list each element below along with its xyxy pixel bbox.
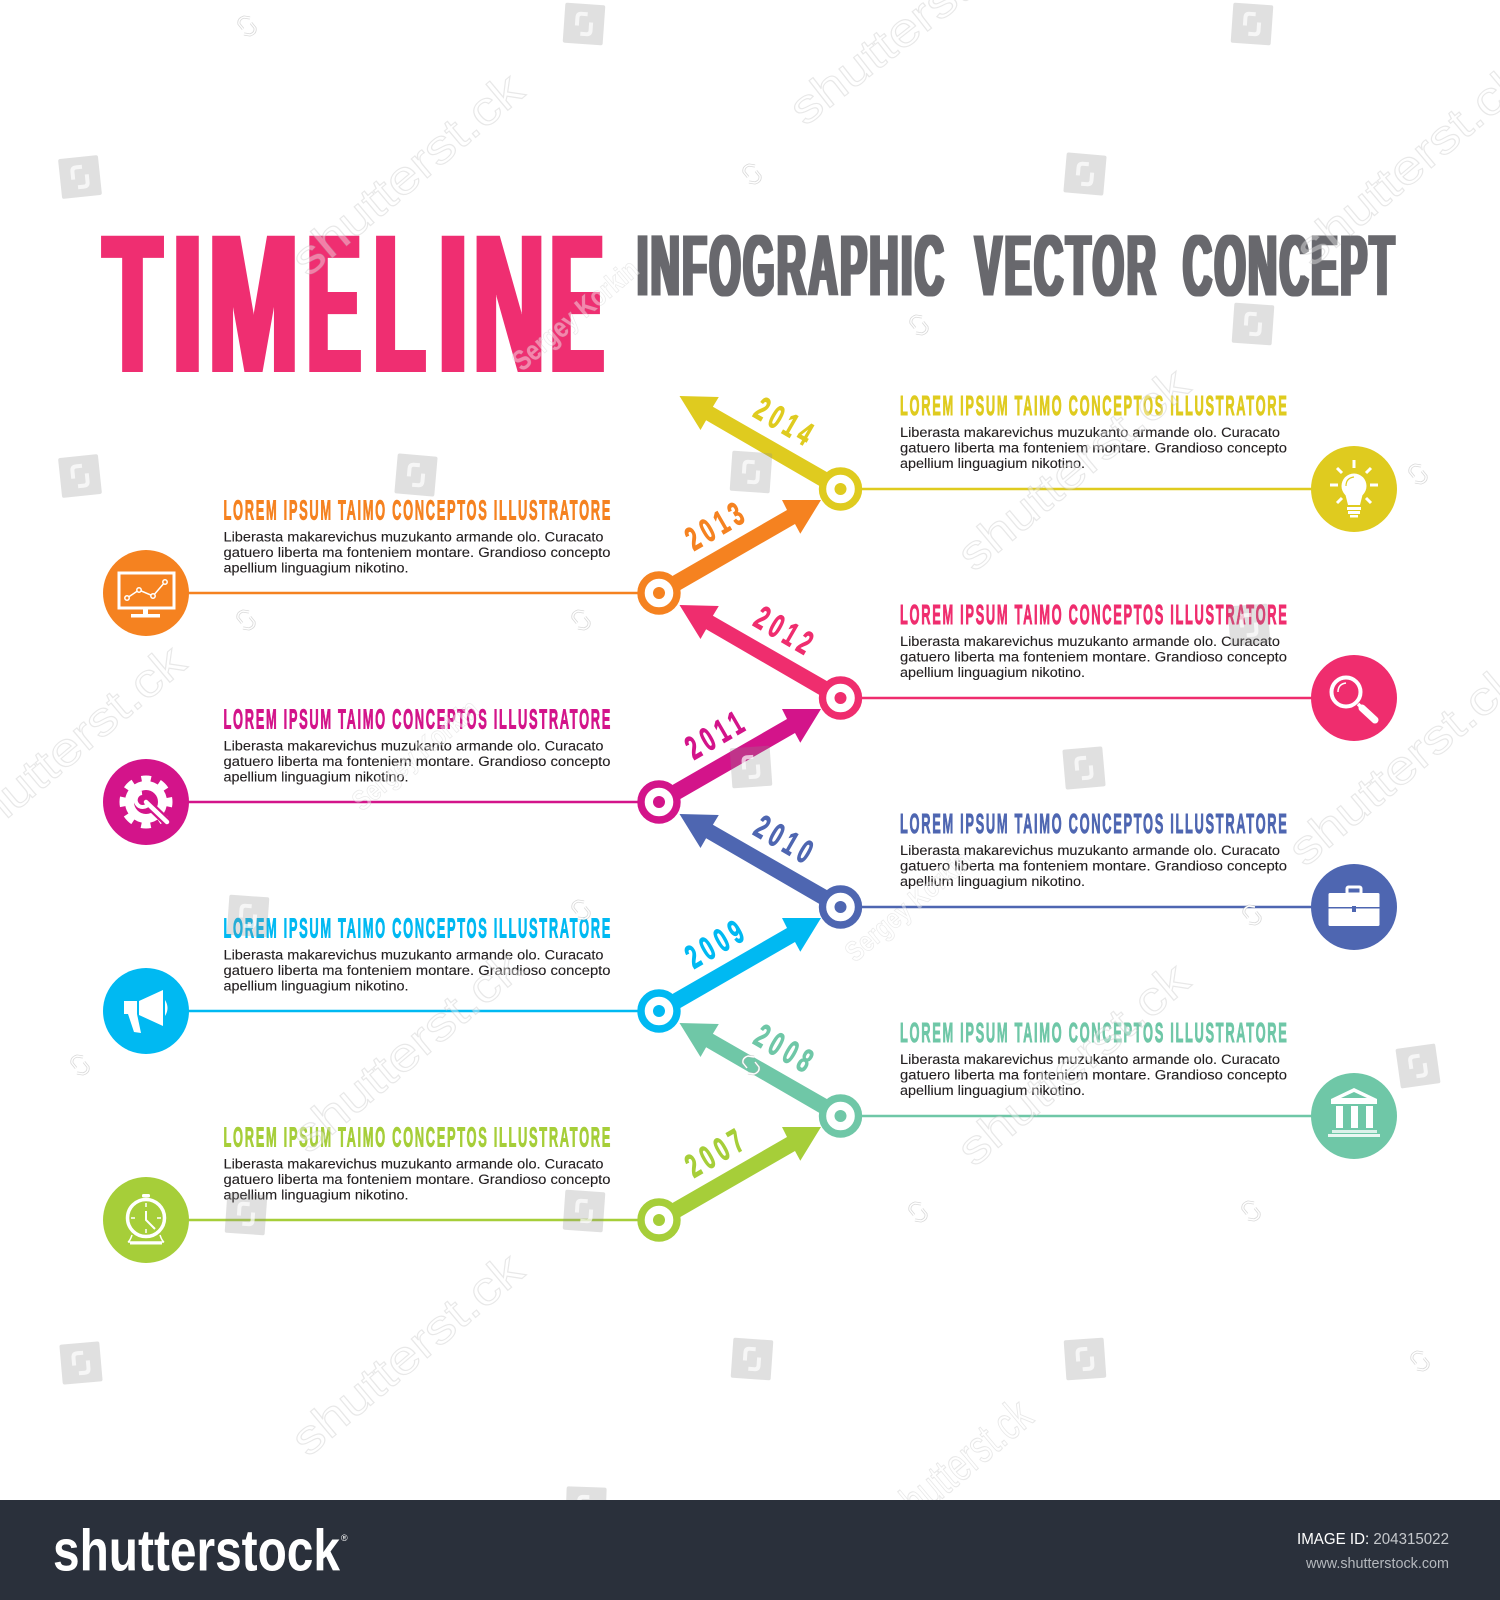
heading 2012: LOREM IPSUM TAIMO CONCEPTOS ILLUSTRATORE xyxy=(900,598,1287,630)
watermark overlay: shutterst.ck xyxy=(1284,51,1500,276)
heading 2007: LOREM IPSUM TAIMO CONCEPTOS ILLUSTRATORE xyxy=(224,1121,610,1153)
arrow 2008 xyxy=(680,1023,844,1123)
heading 2011: LOREM IPSUM TAIMO CONCEPTOS ILLUSTRATORE xyxy=(224,703,610,735)
body text 2014: gatuero liberta ma fonteniem montare. Grandioso concepto xyxy=(900,440,1287,456)
entry 2008 xyxy=(680,1016,1397,1159)
body text 2010 xyxy=(900,843,1287,890)
year 2011: 2011 xyxy=(679,704,750,766)
body text 2009: Liberasta makarevichus muzukanto armande olo. Curacato xyxy=(224,948,604,964)
body text 2007: apellium linguagium nikotino. xyxy=(224,1188,408,1204)
title: TIMELINE: M xyxy=(208,193,298,414)
year 2014: 2014 xyxy=(748,390,820,453)
entry 2010 xyxy=(680,807,1397,950)
body text 2008: Liberasta makarevichus muzukanto armande olo. Curacato xyxy=(900,1052,1280,1068)
body text 2012: Liberasta makarevichus muzukanto armande olo. Curacato xyxy=(900,634,1280,650)
title: TIMELINE: T xyxy=(104,193,162,414)
arrow 2012 xyxy=(680,605,844,705)
watermark overlay: shutterst.ck xyxy=(946,356,1199,581)
arrow 2014 xyxy=(680,396,844,496)
heading 2013: LOREM IPSUM TAIMO CONCEPTOS ILLUSTRATORE xyxy=(224,494,610,526)
icon: briefcase xyxy=(1311,864,1397,950)
body text 2010: Liberasta makarevichus muzukanto armande olo. Curacato xyxy=(900,843,1280,859)
year 2010: 2010 xyxy=(748,808,819,870)
body text 2007 xyxy=(224,1156,611,1204)
subtitle: INFOGRAPHIC VECTOR CONCEPT: INFOGRAPHIC xyxy=(637,218,944,315)
title: TIMELINE: L xyxy=(374,193,425,414)
watermark overlay: Sergey Korkin xyxy=(346,693,485,817)
node 2010 xyxy=(822,889,858,925)
entry 2009 xyxy=(103,912,821,1054)
footer bar xyxy=(0,1500,1500,1600)
subtitle: INFOGRAPHIC VECTOR CONCEPT: VECTOR xyxy=(975,218,1156,315)
watermark overlay: Sergey Korkin xyxy=(506,253,645,377)
arrow 2013 xyxy=(655,500,821,600)
heading 2010: LOREM IPSUM TAIMO CONCEPTOS ILLUSTRATORE xyxy=(900,807,1287,839)
entry 2014 xyxy=(680,389,1397,532)
watermark overlay: shutterst.ck xyxy=(280,61,533,286)
node 2011 xyxy=(641,784,677,820)
icon: megaphone xyxy=(103,968,189,1054)
node 2014 xyxy=(822,471,858,507)
body text 2007: gatuero liberta ma fonteniem montare. Grandioso concepto xyxy=(224,1172,611,1188)
watermark overlay: Sergey Korkin xyxy=(839,844,978,968)
body text 2014: apellium linguagium nikotino. xyxy=(900,456,1085,472)
arrow 2009 xyxy=(655,918,821,1018)
arrow 2007 xyxy=(655,1127,821,1227)
site url: www.shutterstock.com xyxy=(1305,1555,1449,1572)
heading 2009: LOREM IPSUM TAIMO CONCEPTOS ILLUSTRATORE xyxy=(224,912,610,944)
title: TIMELINE: N xyxy=(474,193,544,414)
body text 2012: gatuero liberta ma fonteniem montare. Grandioso concepto xyxy=(900,650,1287,666)
body text 2011: Liberasta makarevichus muzukanto armande olo. Curacato xyxy=(224,738,604,754)
node 2013 xyxy=(641,575,677,611)
registered mark: ® xyxy=(341,1533,348,1543)
body text 2011: gatuero liberta ma fonteniem montare. Grandioso concepto xyxy=(224,754,611,770)
year 2009: 2009 xyxy=(679,913,750,975)
year 2008: 2008 xyxy=(748,1017,819,1079)
body text 2009: gatuero liberta ma fonteniem montare. Grandioso concepto xyxy=(224,963,611,979)
year 2007: 2007 xyxy=(679,1122,750,1184)
body text 2013: Liberasta makarevichus muzukanto armande olo. Curacato xyxy=(224,530,604,546)
year 2012: 2012 xyxy=(748,599,819,661)
entry 2007 xyxy=(103,1121,821,1263)
image id: IMAGE ID: 204315022 xyxy=(1297,1531,1449,1548)
body text 2011 xyxy=(224,738,611,786)
heading 2014: LOREM IPSUM TAIMO CONCEPTOS ILLUSTRATORE xyxy=(900,389,1287,421)
icon: light bulb xyxy=(1311,446,1397,532)
title: TIMELINE: I xyxy=(438,193,468,414)
node 2007 xyxy=(641,1202,677,1238)
body text 2008 xyxy=(900,1052,1287,1099)
body text 2013: apellium linguagium nikotino. xyxy=(224,560,408,576)
body text 2007: Liberasta makarevichus muzukanto armande olo. Curacato xyxy=(224,1156,604,1172)
body text 2009 xyxy=(224,948,611,994)
body text 2013 xyxy=(224,530,611,576)
body text 2008: gatuero liberta ma fonteniem montare. Grandioso concepto xyxy=(900,1068,1287,1084)
node 2009 xyxy=(641,993,677,1029)
body text 2010: apellium linguagium nikotino. xyxy=(900,874,1085,890)
body text 2009: apellium linguagium nikotino. xyxy=(224,978,408,994)
body text 2008: apellium linguagium nikotino. xyxy=(900,1083,1085,1099)
body text 2012 xyxy=(900,634,1287,681)
title: TIMELINE: E xyxy=(308,193,360,414)
watermark overlay: shutterst.ck xyxy=(946,951,1199,1176)
icon: bank building xyxy=(1311,1073,1397,1159)
node 2008 xyxy=(822,1098,858,1134)
body text 2014: Liberasta makarevichus muzukanto armande olo. Curacato xyxy=(900,425,1280,441)
watermark overlay: shutterst.ck xyxy=(280,1241,533,1466)
entry 2012 xyxy=(680,598,1397,741)
body text 2013: gatuero liberta ma fonteniem montare. Grandioso concepto xyxy=(224,545,611,561)
year 2013: 2013 xyxy=(679,495,750,557)
watermark overlay: shutterst.ck xyxy=(877,1388,1042,1538)
icon: magnifier xyxy=(1311,655,1397,741)
arrow 2011 xyxy=(655,709,821,809)
subtitle: INFOGRAPHIC VECTOR CONCEPT xyxy=(637,218,1394,315)
title: TIMELINE: I xyxy=(172,193,202,414)
body text 2011: apellium linguagium nikotino. xyxy=(224,770,408,786)
watermark overlay: shutterst.ck xyxy=(1277,651,1500,876)
icon: monitor chart xyxy=(103,550,189,636)
body text 2012: apellium linguagium nikotino. xyxy=(900,665,1085,681)
icon: stopwatch clock xyxy=(103,1177,189,1263)
body text 2010: gatuero liberta ma fonteniem montare. Grandioso concepto xyxy=(900,858,1287,874)
entry 2013 xyxy=(103,494,821,636)
subtitle: INFOGRAPHIC VECTOR CONCEPT: CONCEPT xyxy=(1183,218,1394,315)
entry 2011 xyxy=(103,703,821,845)
heading 2008: LOREM IPSUM TAIMO CONCEPTOS ILLUSTRATORE xyxy=(900,1016,1287,1048)
node 2012 xyxy=(822,680,858,716)
arrow 2010 xyxy=(680,814,844,914)
icon: gear and wrench xyxy=(103,759,189,845)
body text 2014 xyxy=(900,425,1287,472)
text: E xyxy=(550,193,604,414)
footer logo: shutterstock xyxy=(53,1518,341,1584)
watermark overlay: shutterst.ck xyxy=(280,938,533,1163)
